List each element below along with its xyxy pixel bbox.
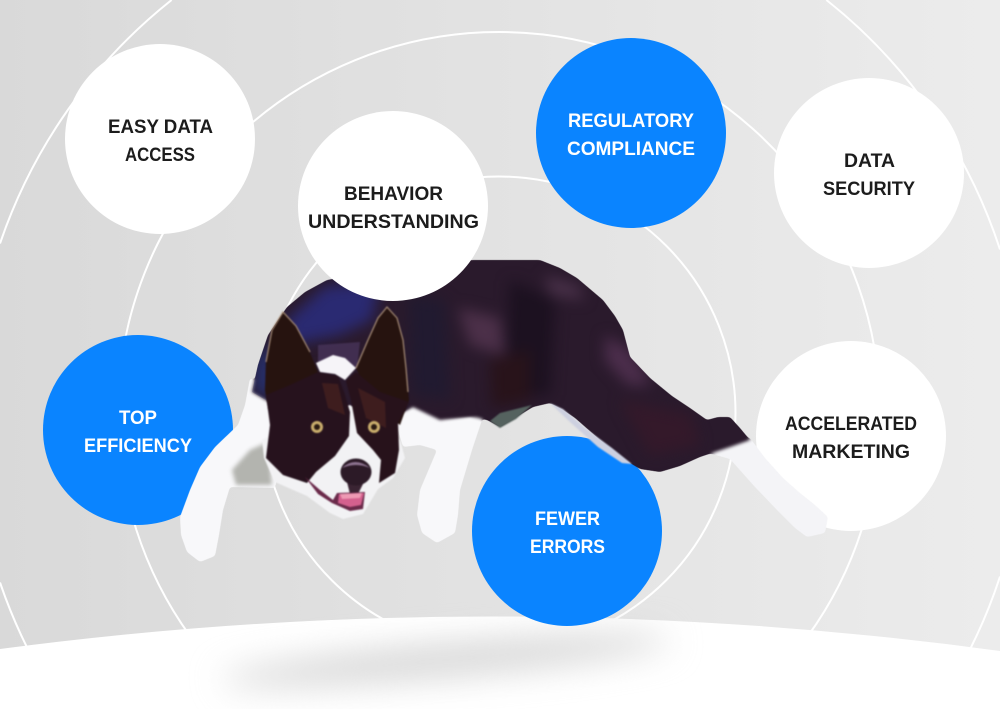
head group [262, 307, 409, 519]
mouth [305, 477, 365, 511]
circle: behavior understanding: UNDERSTANDING [308, 211, 479, 233]
circle: fewer errors: ERRORS [530, 536, 605, 558]
eyes [311, 421, 323, 433]
ruff and muzzle white [262, 405, 405, 519]
ear rims [266, 307, 408, 392]
circle: fewer errors [472, 436, 662, 626]
left face patch [266, 372, 350, 483]
philtrum [347, 482, 364, 494]
body [252, 260, 750, 472]
circle: regulatory compliance: REGULATORY [568, 110, 694, 132]
left front leg [180, 378, 285, 562]
circle: regulatory compliance [536, 38, 726, 228]
circle: top efficiency: EFFICIENCY [84, 435, 192, 457]
white floor [0, 616, 1000, 709]
right face patch [346, 372, 409, 483]
circle: behavior understanding [298, 111, 488, 301]
forehead white [316, 355, 356, 380]
hind leg white [705, 438, 828, 537]
circle: accelerated marketing: ACCELERATED [785, 413, 917, 435]
left ear [265, 312, 318, 425]
brown fur tone [322, 383, 386, 428]
circle: easy data access: EASY DATA [108, 116, 213, 138]
right front leg and chest [395, 407, 483, 543]
circle: accelerated marketing [756, 341, 946, 531]
neck purple band [318, 342, 360, 368]
floor shadow [221, 625, 671, 695]
circle: data security: DATA [844, 150, 895, 172]
shoulder grey fur [232, 442, 272, 485]
right ear [356, 307, 409, 425]
circle: easy data access [65, 44, 255, 234]
tongue [338, 493, 364, 507]
circle: regulatory compliance: COMPLIANCE [567, 138, 695, 160]
illustration: border collie dog [180, 260, 828, 562]
fur shading [255, 275, 700, 455]
circle: fewer errors: FEWER [535, 508, 600, 530]
belly sliver [550, 403, 632, 464]
circle: accelerated marketing: MARKETING [792, 441, 910, 463]
circle: easy data access: ACCESS [125, 144, 195, 166]
grey belly fur [490, 405, 532, 428]
nose [340, 458, 372, 486]
circle: data security: SECURITY [823, 178, 915, 200]
circle: behavior understanding: BEHAVIOR [344, 183, 443, 205]
circle: top efficiency [43, 335, 233, 525]
circle: data security [774, 78, 964, 268]
circle: top efficiency: TOP [119, 407, 157, 429]
